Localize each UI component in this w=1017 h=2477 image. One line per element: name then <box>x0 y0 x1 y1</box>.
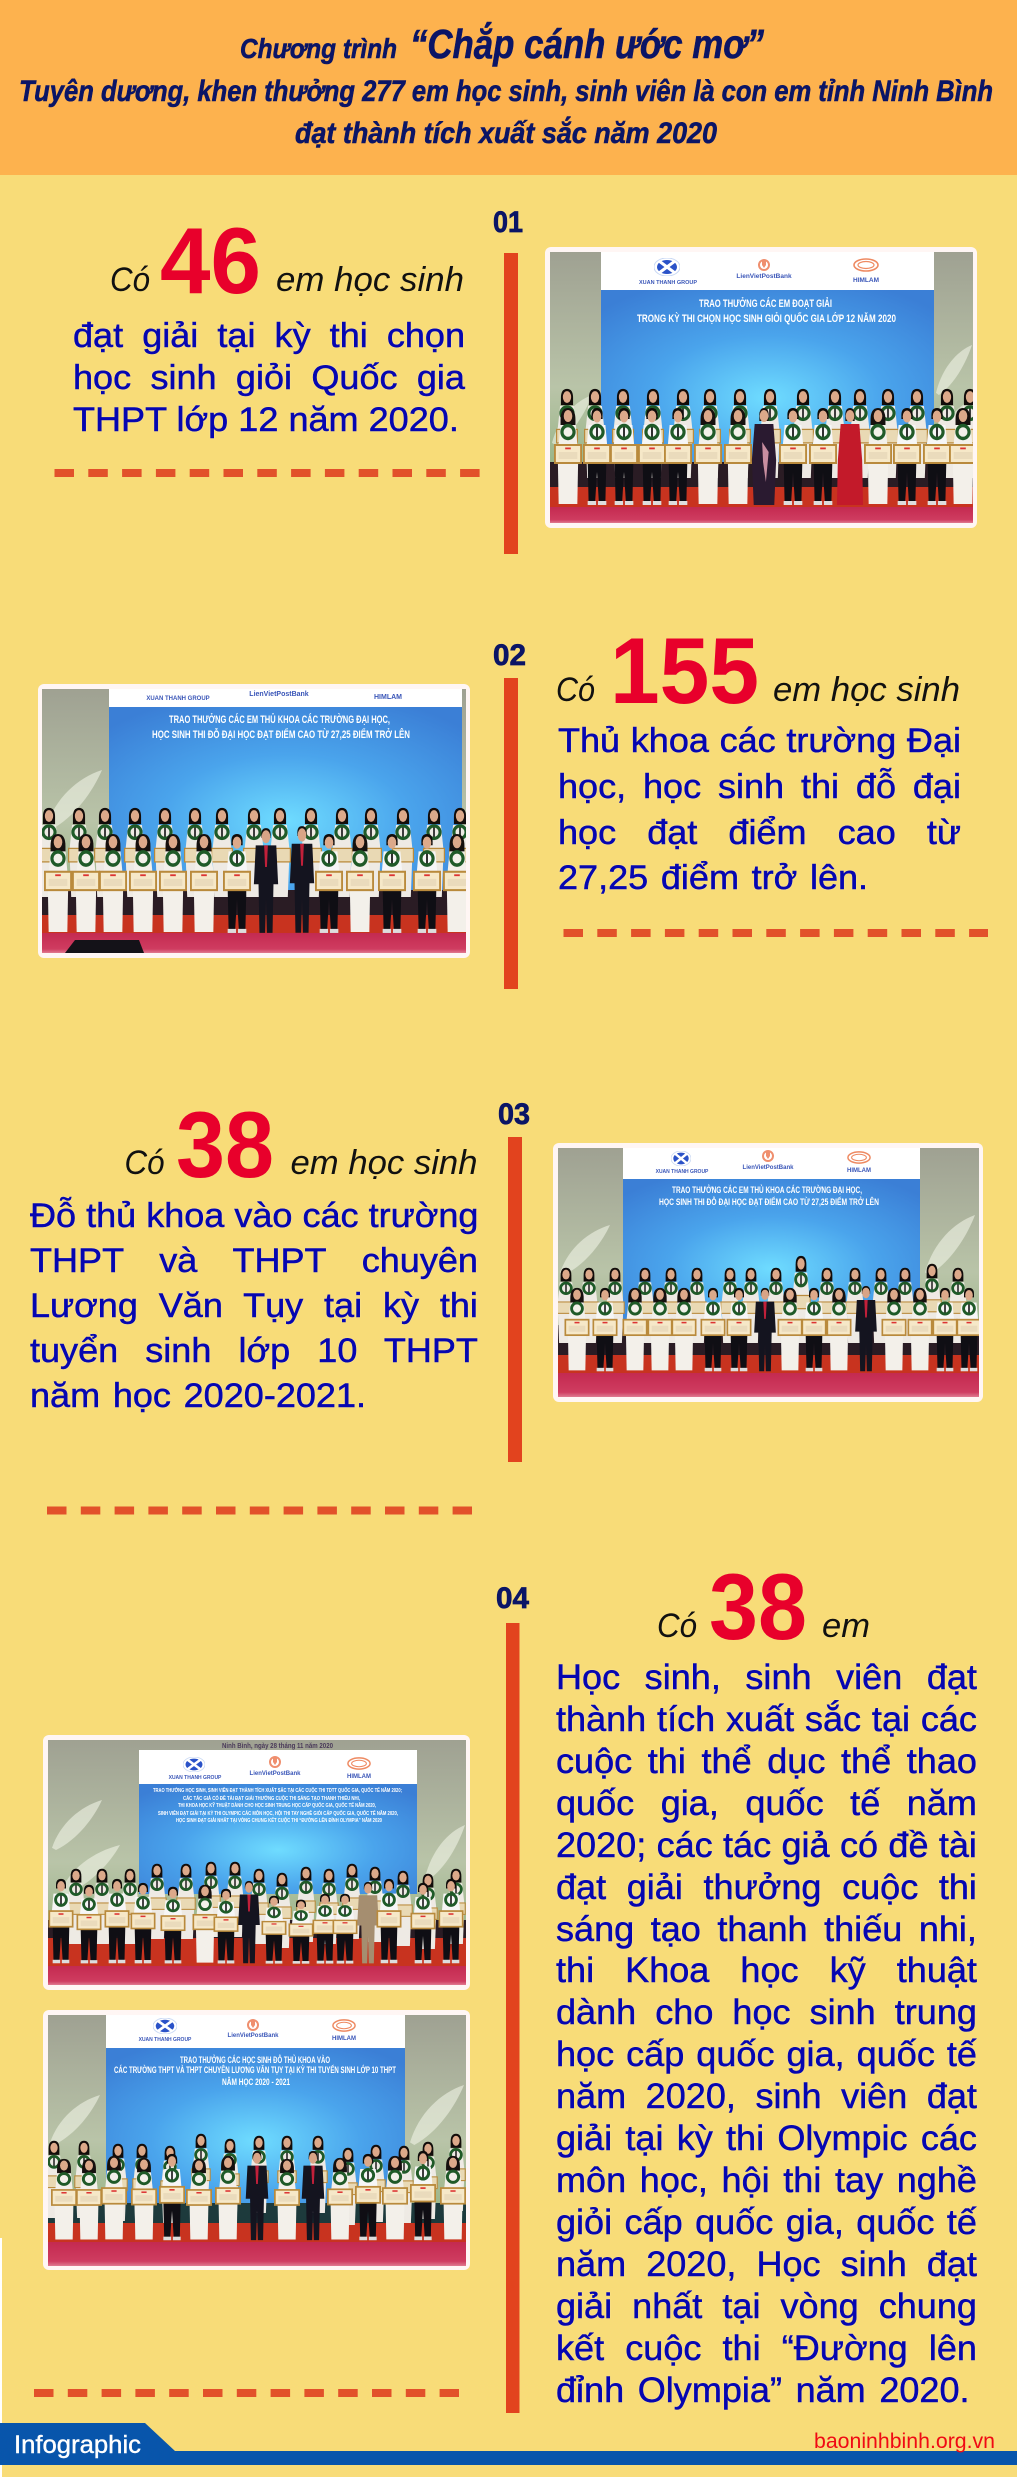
photo: outstanding students and authors award: LienVietPostBank <box>250 1771 301 1777</box>
body text 4: Học sinh, sinh viên đạt <box>556 1658 977 1697</box>
photo: top high school entrants ceremony: TRAO THƯỞNG CÁC HỌC SINH ĐỖ THỦ KHOA VÀO <box>180 2054 330 2065</box>
body text 4: đỉnh Olympia” năm 2020. <box>556 2371 970 2410</box>
body text 1 <box>73 317 466 439</box>
title: đạt thành tích xuất sắc năm 2020 <box>295 116 717 150</box>
title <box>19 21 993 150</box>
body text 3: Lương Văn Tụy tại kỳ thi <box>30 1287 478 1325</box>
headline: 38 em: em <box>822 1607 870 1645</box>
photo: national excellent student award: TRAO THƯỞNG CÁC EM ĐOẠT GIẢI <box>699 297 832 310</box>
body text 4: giải nhất tại vòng chung <box>556 2287 977 2326</box>
photo: national excellent student award: XUAN THANH GROUP <box>639 280 697 286</box>
headline: 38 em học sinh: em học sinh <box>290 1144 478 1182</box>
photo: top high school entrants award: XUAN THANH GROUP <box>656 1169 709 1175</box>
body text 4: năm 2020, sinh viên đạt <box>556 2077 977 2116</box>
number 01: 01 <box>493 206 523 239</box>
body text 2: Thủ khoa các trường Đại <box>558 722 961 760</box>
body text 4: kết cuộc thi “Đường lên <box>556 2329 977 2368</box>
photo: top high school entrants ceremony: HIMLAM <box>332 2036 356 2042</box>
footer bar <box>0 2423 1017 2465</box>
photo: top high school entrants award <box>553 1143 983 1402</box>
body text 1: đạt giải tại kỳ thi chọn <box>73 317 465 355</box>
photo: outstanding students and authors award: CÁC TÁC GIẢ CÓ ĐỀ TÀI ĐẠT GIẢI THƯỞNG CUỘC THI SÁNG TẠO THANH THIẾU NHI, <box>183 1794 360 1802</box>
body text 4: đạt giải thưởng cuộc thi <box>556 1868 977 1907</box>
body text 4: quốc gia, quốc tế năm <box>556 1784 977 1823</box>
body text 4: dành cho học sinh trung <box>556 1993 977 2032</box>
body text 4: 2020; các tác giả có đề tài <box>556 1826 977 1865</box>
body text 3: THPT và THPT chuyên <box>30 1242 478 1280</box>
photo: outstanding students and authors award: SINH VIÊN ĐẠT GIẢI TẠI KỲ THI OLYMPIC CÁC MÔN HỌC, HỘI THI TAY NGHỀ GIỎI CẤP QUỐC GIA, QUỐC TẾ NĂM 2020, <box>158 1809 398 1817</box>
photo: outstanding students and authors award <box>43 1735 470 1990</box>
vertical bar <box>504 678 518 989</box>
body text 4: giỏi cấp quốc gia, quốc tế <box>556 2203 977 2242</box>
headline: 46 em học sinh: Có <box>110 261 150 299</box>
headline: 38 em học sinh: 38 <box>176 1092 274 1197</box>
photo: outstanding students and authors award: XUAN THANH GROUP <box>169 1775 222 1781</box>
body text 4: cuộc thi thể dục thể thao <box>556 1742 977 1781</box>
number 02: 02 <box>493 639 526 672</box>
source: baoninhbinh.org.vn: baoninhbinh.org.vn <box>814 2430 995 2453</box>
photo: top high school entrants ceremony <box>43 2010 470 2270</box>
headline: 38 em: Có <box>657 1607 697 1645</box>
photo: national excellent student award: LienVietPostBank <box>736 273 792 280</box>
photo: outstanding students and authors award: HIMLAM <box>347 1774 371 1780</box>
photo: top high school entrants award: HỌC SINH THI ĐỖ ĐẠI HỌC ĐẠT ĐIỂM CAO TỪ 27,25 ĐIỂM TRỞ LÊN <box>659 1196 879 1208</box>
panel: section 4 <box>34 1554 978 2413</box>
body text 3: tuyển sinh lớp 10 THPT <box>30 1332 478 1370</box>
headline: 46 em học sinh: em học sinh <box>276 261 464 299</box>
photo: national excellent student award: HIMLAM <box>853 277 879 284</box>
headline: 155 em học sinh <box>556 618 960 723</box>
headline: 155 em học sinh: 155 <box>610 618 759 723</box>
photo: top high school entrants award: HIMLAM <box>847 1168 871 1174</box>
title: Chương trình <box>240 33 397 64</box>
headline: 38 em học sinh: Có <box>124 1144 164 1182</box>
body text 4: môn học, hội thi tay nghề <box>556 2161 977 2200</box>
body text 4: thành tích xuất sắc tại các <box>556 1700 977 1739</box>
header banner <box>0 0 1017 175</box>
photo: top high school entrants award: TRAO THƯỞNG CÁC EM THỦ KHOA CÁC TRƯỜNG ĐẠI HỌC, <box>672 1184 862 1196</box>
photo: top university students award: HIMLAM <box>374 694 402 701</box>
panel: section 2 <box>38 618 988 989</box>
headline: 46 em học sinh <box>110 208 464 313</box>
body text 3: năm học 2020-2021. <box>30 1377 366 1415</box>
vertical bar <box>508 1137 522 1462</box>
body text 4: năm 2020, Học sinh đạt <box>556 2245 977 2284</box>
body text 2: học, học sinh thi đỗ đại <box>558 768 961 806</box>
body text 4: giải tại kỳ thi Olympic các <box>556 2119 977 2158</box>
headline: 38 em: 38 <box>709 1554 807 1659</box>
photo: national excellent student award: TRONG KỲ THI CHỌN HỌC SINH GIỎI QUỐC GIA LỚP 12 NĂM 2020 <box>637 311 896 325</box>
title: “Chắp cánh ước mơ” <box>410 21 764 67</box>
vertical bar <box>504 253 518 554</box>
body text 1: THPT lớp 12 năm 2020. <box>73 401 459 439</box>
body text 3 <box>30 1196 478 1415</box>
label: Infographic: Infographic <box>14 2431 141 2459</box>
photo: top university students award: LienVietPostBank <box>249 691 309 698</box>
body text 2: 27,25 điểm trở lên. <box>558 859 868 897</box>
body text 4: thi Khoa học kỹ thuật <box>556 1951 977 1990</box>
photo: top high school entrants award: LienVietPostBank <box>743 1165 794 1171</box>
body text 3: Đỗ thủ khoa vào các trường <box>30 1197 478 1235</box>
number 03: 03 <box>498 1098 530 1131</box>
photo: top high school entrants ceremony: LienVietPostBank <box>228 2033 279 2039</box>
body text 4: học cấp quốc gia, quốc tế <box>556 2035 977 2074</box>
number 04: 04 <box>496 1582 529 1615</box>
headline: 46 em học sinh: 46 <box>160 208 261 313</box>
headline: 155 em học sinh: Có <box>556 671 595 709</box>
headline: 38 em học sinh <box>124 1092 478 1197</box>
headline: 155 em học sinh: em học sinh <box>773 671 960 709</box>
photo: top high school entrants ceremony: XUAN THANH GROUP <box>139 2037 192 2043</box>
body text 4 <box>556 1658 978 2410</box>
body text 2 <box>558 722 961 897</box>
panel: section 1 <box>54 206 977 554</box>
photo: top university students award <box>38 684 470 958</box>
vertical bar <box>506 1623 520 2413</box>
photo: outstanding students and authors award: Ninh Bình, ngày 28 tháng 11 năm 2020 <box>222 1743 333 1750</box>
body text 1: học sinh giỏi Quốc gia <box>73 359 465 397</box>
body text 4: sáng tạo thanh thiếu nhi, <box>556 1910 977 1949</box>
photo: national excellent student award <box>545 247 980 528</box>
panel: section 3 <box>30 1092 983 1514</box>
photo: outstanding students and authors award: HỌC SINH ĐẠT GIẢI NHẤT TẠI VÒNG CHUNG KẾT CUỘC THI “ĐƯỜNG LÊN ĐỈNH OLYMPIA” NĂM 2020 <box>176 1816 382 1824</box>
body text 2: học đạt điểm cao từ <box>558 814 961 852</box>
photo: top high school entrants ceremony: NĂM HỌC 2020 - 2021 <box>222 2077 290 2087</box>
footer tab and stripe <box>0 2423 1017 2465</box>
photo: outstanding students and authors award: THI KHOA HỌC KỸ THUẬT DÀNH CHO HỌC SINH TRUNG HỌC CẤP QUỐC GIA, QUỐC TẾ NĂM 2020, <box>178 1802 376 1809</box>
photo: top university students award: XUAN THANH GROUP <box>146 696 210 702</box>
headline: 38 em <box>657 1554 870 1659</box>
